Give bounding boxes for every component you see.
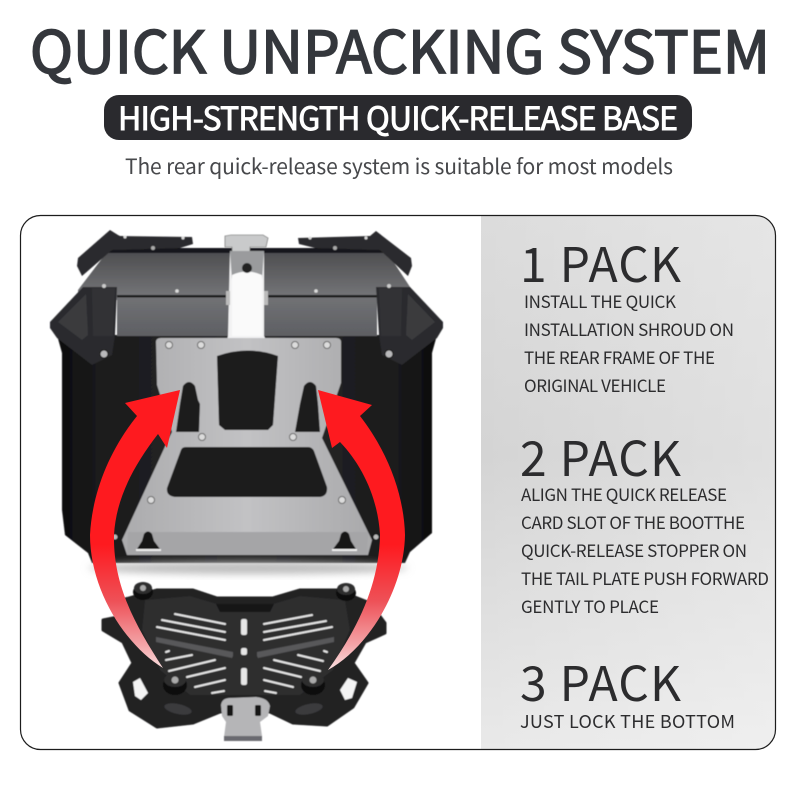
step 2 text: ALIGN THE QUICK RELEASE bbox=[521, 481, 727, 506]
rack centre slots bbox=[241, 619, 247, 685]
step 2 text: GENTLY TO PLACE bbox=[521, 593, 659, 618]
panel outline bbox=[20, 216, 776, 750]
corner guard right bbox=[376, 287, 443, 365]
step 2 bbox=[520, 420, 769, 618]
rack side slots bbox=[133, 678, 357, 717]
step 1 heading: 1 PACK bbox=[520, 226, 681, 296]
subtitle pill: HIGH-STRENGTH QUICK-RELEASE BASE bbox=[118, 94, 678, 140]
top case photo bbox=[50, 230, 443, 563]
tail rack photo bbox=[103, 582, 385, 741]
rack slats bbox=[157, 614, 332, 693]
step 2 heading: 2 PACK bbox=[520, 420, 681, 490]
step 3 heading: 3 PACK bbox=[520, 645, 681, 715]
step 3 bbox=[520, 645, 735, 734]
lower corner screws bbox=[112, 534, 379, 540]
title: QUICK UNPACKING SYSTEM bbox=[30, 6, 770, 90]
step 2 text: THE TAIL PLATE PUSH FORWARD bbox=[521, 565, 769, 590]
rubber mounts bbox=[133, 582, 356, 695]
corner guard left bbox=[50, 287, 117, 365]
step 2 text: CARD SLOT OF THE BOOTTHE bbox=[521, 509, 745, 534]
step 3 text: JUST LOCK THE BOTTOM bbox=[520, 708, 735, 734]
step 1 text bbox=[524, 288, 734, 397]
arrow: right curved red arrow bbox=[318, 390, 405, 670]
step 1 text: THE REAR FRAME OF THE bbox=[524, 344, 715, 369]
case body bbox=[57, 335, 437, 563]
panel: product and instructions bbox=[20, 216, 776, 750]
rack plate bbox=[103, 590, 385, 727]
description line: The rear quick-release system is suitable for most models bbox=[125, 151, 673, 181]
arrow: left curved red arrow bbox=[90, 390, 180, 668]
step 2 text bbox=[521, 481, 769, 618]
step 1 text: ORIGINAL VEHICLE bbox=[524, 372, 666, 397]
case lid bbox=[77, 230, 412, 336]
mounting plate bbox=[122, 338, 372, 555]
step 1 bbox=[520, 226, 734, 397]
step 1 text: INSTALL THE QUICK bbox=[524, 288, 676, 313]
shadow under case bbox=[88, 562, 408, 574]
step 1 text: INSTALLATION SHROUD ON bbox=[524, 316, 734, 341]
step 2 text: QUICK-RELEASE STOPPER ON bbox=[521, 537, 747, 562]
latch bbox=[225, 235, 268, 343]
rack lock tab bbox=[221, 697, 270, 741]
panel: grey instruction column bbox=[481, 216, 775, 749]
panel background bbox=[20, 216, 776, 750]
